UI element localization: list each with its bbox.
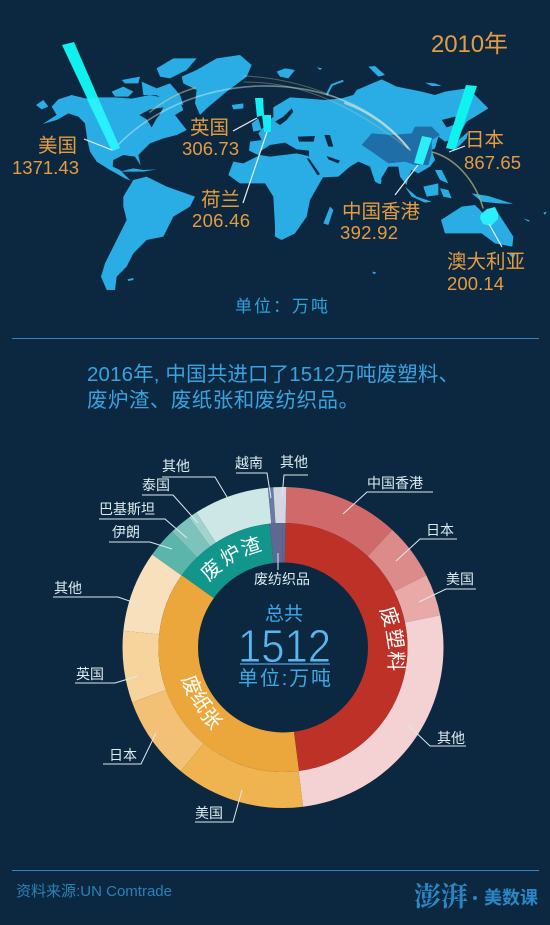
inner ring (178, 543, 388, 752)
outer ring (140, 505, 426, 790)
label: Hong Kong (340, 201, 421, 243)
slice label: Hong Kong plastic: 中国香港 (367, 475, 423, 491)
leader lines on map (84, 118, 502, 247)
slice label: Japan paper (103, 733, 156, 764)
slice label: textile: 废纺织品 (254, 571, 310, 587)
label: Netherlands: 荷兰 (201, 189, 240, 211)
slice label: Vietnam (235, 455, 271, 498)
donut centre total: 1512 (238, 620, 331, 672)
map: inland seas (260, 108, 458, 158)
bar: Hong Kong (414, 136, 432, 165)
slice label: Pakistan (99, 501, 187, 538)
slice label: Pakistan: 巴基斯坦 (99, 501, 155, 517)
slice label: Thailand: 泰国 (142, 477, 170, 493)
ring label: slag (196, 533, 264, 585)
logo: 美数课 (484, 887, 538, 908)
slice label: Hong Kong plastic (343, 475, 433, 514)
slice label: other slag: 其他 (162, 458, 190, 474)
slice label: Japan paper: 日本 (109, 747, 137, 763)
slice label: Japan plastic (396, 522, 457, 561)
label: Hong Kong: 392.92 (340, 222, 398, 243)
slice label: UK paper: 英国 (76, 666, 104, 682)
slice label: Iran: 伊朗 (112, 524, 140, 540)
label: United Kingdom (182, 117, 239, 159)
ring label: paper (177, 672, 226, 734)
slice label: other textile: 其他 (280, 454, 308, 470)
slice label: other slag (162, 458, 233, 507)
label: Australia: 澳大利亚 (447, 251, 525, 273)
label: Australia: 200.14 (447, 273, 504, 294)
slice label: Iran (109, 524, 172, 549)
bars on map (62, 42, 498, 226)
label: United Kingdom: 英国 (190, 117, 229, 139)
slice label: other paper: 其他 (54, 580, 82, 596)
world map (36, 55, 547, 290)
donut centre total: 单位:万吨 (238, 667, 331, 690)
label: Japan (464, 129, 521, 173)
label: Japan: 日本 (465, 129, 504, 151)
bar: United States (62, 42, 120, 151)
ring label: slag: 炉 (216, 540, 245, 570)
ring label: paper: 张 (196, 704, 226, 734)
ring label: plastic: 塑 (381, 627, 407, 651)
headline (87, 363, 459, 412)
map: red sea and gulf (307, 156, 340, 175)
ring label: paper: 废 (177, 672, 205, 699)
headline: 废炉渣、废纸张和废纺织品。 (87, 389, 359, 412)
slice label: UK paper (75, 666, 138, 683)
source: 资料来源:UN Comtrade (16, 883, 172, 900)
ring label: plastic (375, 604, 407, 671)
slice label: other plastic (408, 725, 466, 746)
bar: Japan (446, 85, 477, 150)
headline: 2016年, 中国共进口了1512万吨废塑料、 (87, 363, 459, 386)
bar: United Kingdom (255, 98, 264, 117)
label: Japan: 867.65 (464, 152, 521, 173)
ring label: plastic: 料 (384, 651, 407, 671)
label: United States (12, 135, 79, 178)
slice label: US plastic: 美国 (446, 571, 474, 587)
bar: United States lower glow (87, 98, 120, 151)
trade arcs (118, 76, 483, 208)
slice label: other paper (53, 580, 141, 605)
slice label: Thailand (142, 477, 198, 523)
map: Africa (228, 153, 323, 240)
label: Australia (447, 251, 525, 294)
ring label: slag: 渣 (238, 533, 264, 561)
slice label: US paper (195, 790, 242, 822)
label: United States: 美国 (38, 135, 77, 157)
logo: 澎湃 (414, 875, 468, 914)
slice label: Japan plastic: 日本 (426, 522, 454, 538)
logo (414, 875, 538, 914)
label: Netherlands: 206.46 (192, 210, 250, 231)
title: year: 2010年 (431, 31, 508, 58)
bar: Netherlands (262, 115, 271, 132)
label: Netherlands (192, 189, 250, 231)
donut centre total: 总共 (265, 603, 303, 625)
slice label: US plastic (419, 571, 476, 602)
slice label: Vietnam: 越南 (235, 455, 263, 471)
label: United Kingdom: 306.73 (182, 138, 239, 159)
slice label: textile (254, 553, 310, 587)
map: Eurasia, Africa and Oceania (228, 66, 547, 274)
donut chart (53, 454, 476, 822)
donut centre total (238, 603, 331, 690)
map: China highlight (362, 127, 440, 165)
bar: Australia (480, 207, 498, 226)
ring label: paper: 纸 (186, 687, 216, 716)
map: Americas and Greenland (36, 55, 262, 290)
label: Hong Kong: 中国香港 (342, 201, 421, 223)
slice label: US paper: 美国 (195, 805, 223, 821)
label: United States: 1371.43 (12, 157, 79, 178)
slice label: other plastic: 其他 (437, 730, 465, 746)
slice label: other textile (280, 454, 308, 497)
ring label: plastic: 废 (375, 604, 403, 630)
ring label: slag: 废 (196, 555, 227, 585)
map unit: 单位：万吨 (235, 297, 328, 316)
